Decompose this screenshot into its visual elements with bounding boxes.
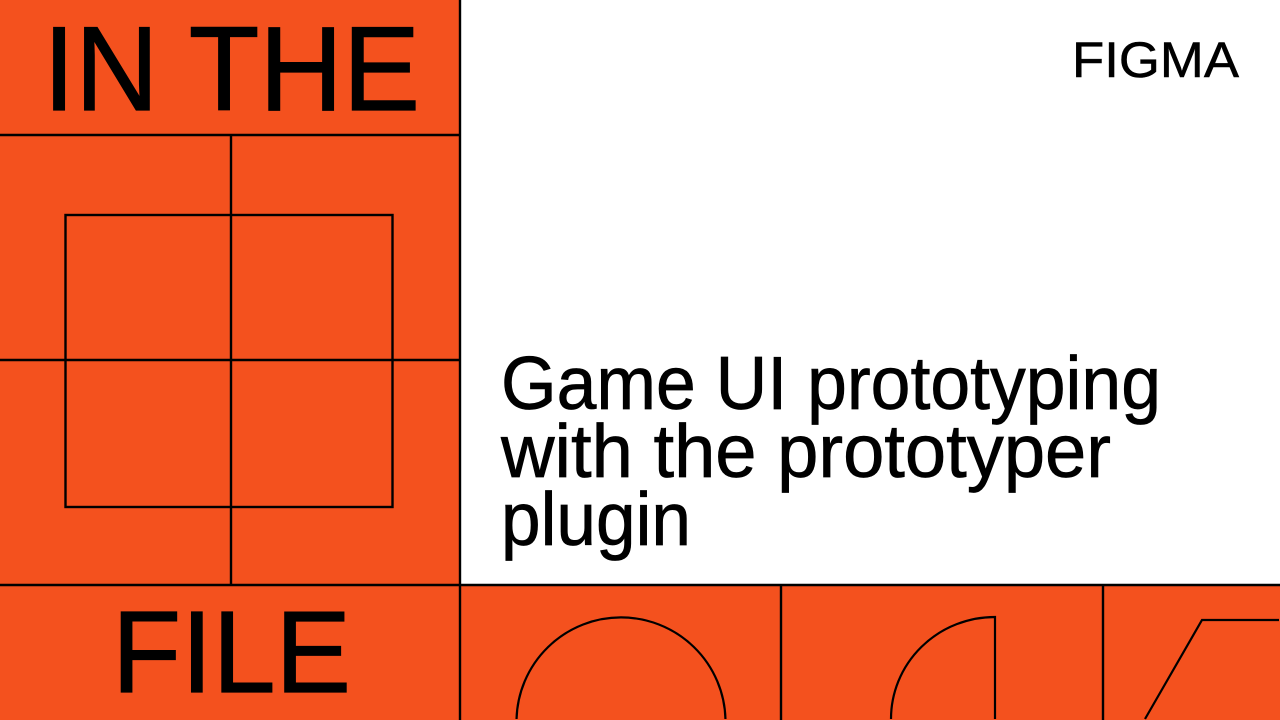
heading: FILE: FILE xyxy=(112,587,351,717)
title: Game UI prototyping with the prototyper plugin xyxy=(500,341,1161,561)
icon: circle shape xyxy=(517,617,725,719)
title: Game UI prototyping with the prototyper plugin: with the prototyper xyxy=(500,409,1111,493)
heading: IN THE: IN THE xyxy=(43,2,420,136)
icon: half circle shape xyxy=(891,617,995,719)
icon: square with crosshair xyxy=(0,135,460,585)
icon: trapezoid shape xyxy=(1145,620,1279,719)
title: Game UI prototyping with the prototyper plugin: Game UI prototyping xyxy=(501,341,1161,425)
title: Game UI prototyping with the prototyper plugin: plugin xyxy=(501,477,691,561)
brand: FIGMA: FIGMA xyxy=(1072,32,1240,88)
